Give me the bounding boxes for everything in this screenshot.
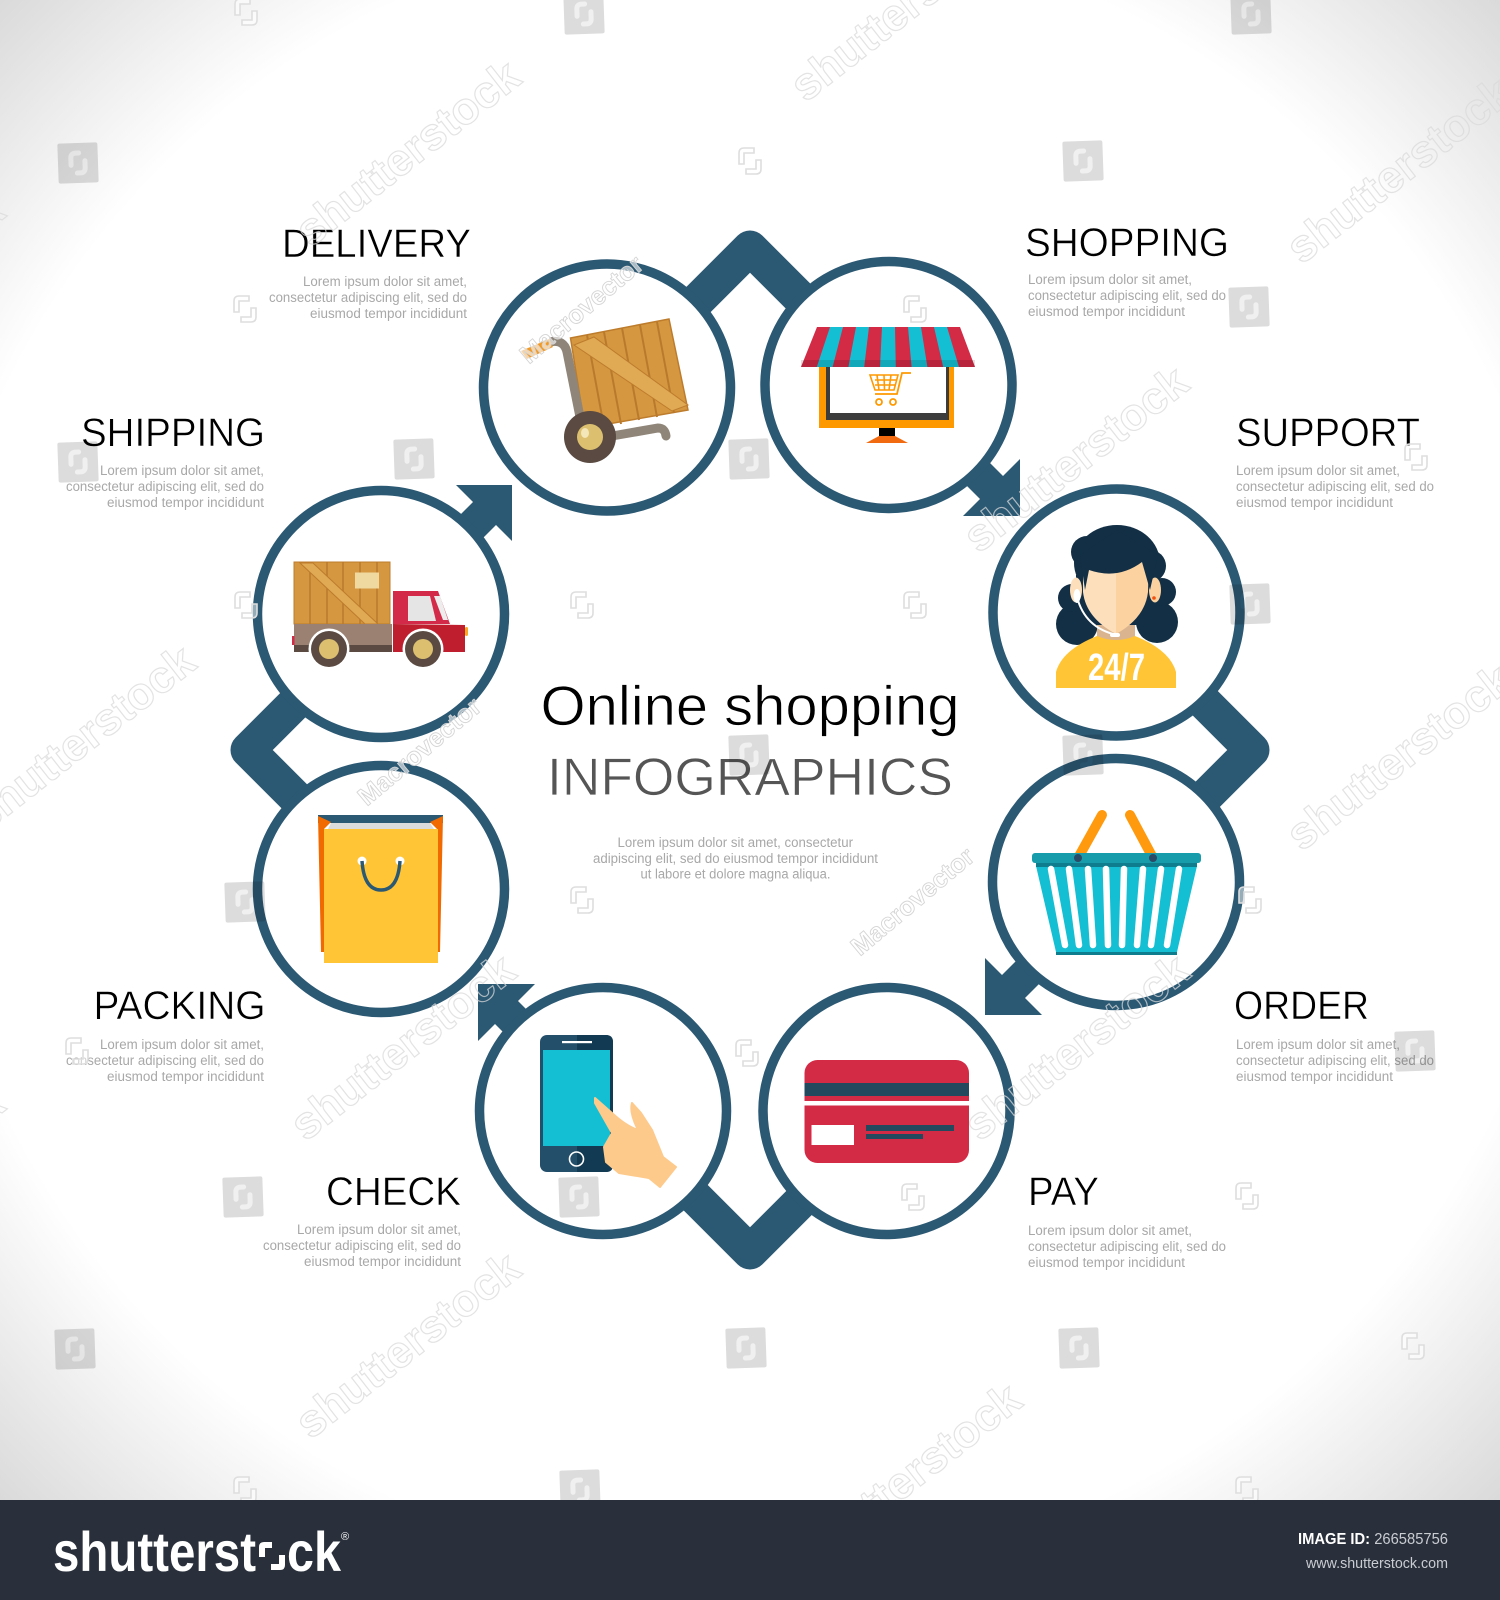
label: packing: PACKING: [94, 984, 266, 1028]
icon: shopping basket: [1032, 815, 1201, 955]
connector: pay to check chevron: [680, 1182, 820, 1252]
label: shipping: eiusmod tempor incididunt: [107, 495, 264, 510]
label: order: eiusmod tempor incididunt: [1236, 1069, 1393, 1084]
connector: packing to shipping chevron: [248, 680, 318, 820]
watermark: shutterstock and macrovector overlays: shutterstock: [280, 943, 525, 1150]
text block: center description: Lorem ipsum dolor sit amet, consectetur: [618, 835, 853, 850]
label: delivery: eiusmod tempor incididunt: [310, 306, 467, 321]
text block: center description: [593, 835, 878, 882]
label: support: consectetur adipiscing elit, sed do: [1236, 479, 1434, 494]
label: support: [1236, 411, 1434, 510]
watermark: shutterstock and macrovector overlays: shutterstock: [285, 1241, 530, 1448]
circle: packing: [258, 766, 504, 1012]
label: shopping: eiusmod tempor incididunt: [1028, 304, 1185, 319]
connector: support to order chevron: [1182, 680, 1252, 820]
arrow: shopping to support: [937, 433, 1020, 516]
arrow: check to packing: [478, 984, 561, 1067]
footer bar: [0, 1500, 1500, 1600]
circle: order: [992, 758, 1240, 1006]
label: order: consectetur adipiscing elit, sed do: [1236, 1053, 1434, 1068]
label: delivery: consectetur adipiscing elit, sed do: [269, 290, 467, 305]
footer: website: www.shutterstock.com: [1305, 1555, 1448, 1572]
ring connectors and arrows: [248, 248, 1252, 1252]
label: shopping: SHOPPING: [1025, 221, 1229, 265]
circle: check: [480, 988, 726, 1234]
watermark: shutterstock and macrovector overlays: shutterstock: [285, 49, 530, 256]
footer: shutterstock logo: o: [259, 1520, 285, 1583]
footer: image id: IMAGE ID: 266585756: [1298, 1531, 1448, 1548]
icon: storefront monitor with cart: [801, 327, 975, 443]
arrow: order to pay: [985, 932, 1068, 1015]
label: pay: eiusmod tempor incididunt: [1028, 1255, 1185, 1270]
circle: shopping: [765, 262, 1012, 508]
footer: shutterstock logo: shutterst: [53, 1520, 256, 1583]
label: pay: consectetur adipiscing elit, sed do: [1028, 1239, 1226, 1254]
label: shipping: consectetur adipiscing elit, sed do: [66, 479, 264, 494]
label: shopping: consectetur adipiscing elit, sed do: [1028, 288, 1226, 303]
footer: shutterstock logo: ck: [287, 1520, 342, 1583]
title: online shopping infographics: [540, 674, 960, 807]
label: order: [1234, 984, 1434, 1084]
label: check: [263, 1170, 461, 1269]
label: shipping: Lorem ipsum dolor sit amet,: [100, 463, 264, 478]
circle: delivery: [484, 264, 730, 511]
title: online shopping infographics: INFOGRAPHICS: [547, 748, 953, 807]
label: check: eiusmod tempor incididunt: [304, 1254, 461, 1269]
label: support: eiusmod tempor incididunt: [1236, 495, 1393, 510]
watermark: shutterstock and macrovector overlays: shutterstock: [954, 943, 1199, 1150]
label: support: SUPPORT: [1236, 411, 1420, 455]
label: check: consectetur adipiscing elit, sed do: [263, 1238, 461, 1253]
label: packing: eiusmod tempor incididunt: [107, 1069, 264, 1084]
label: pay: PAY: [1028, 1170, 1099, 1214]
circle: pay: [763, 988, 1010, 1234]
label: shopping: Lorem ipsum dolor sit amet,: [1028, 272, 1192, 287]
label: pay: [1028, 1170, 1226, 1270]
label: packing: consectetur adipiscing elit, sed do: [66, 1053, 264, 1068]
label: check: CHECK: [326, 1170, 461, 1214]
icon: support agent 24/7: [1056, 525, 1178, 689]
icon: shopping bag: [318, 815, 443, 963]
icon: hand truck with crate: [521, 319, 688, 463]
icon: delivery truck: [292, 562, 468, 670]
label: delivery: Lorem ipsum dolor sit amet,: [303, 274, 467, 289]
connector: delivery to shopping chevron: [680, 248, 820, 318]
title: online shopping infographics: Online shopping: [540, 674, 960, 737]
footer: registered mark: ®: [341, 1531, 349, 1543]
text: 24/7: 24/7: [1088, 647, 1145, 689]
text block: center description: adipiscing elit, sed do eiusmod tempor incididunt: [593, 851, 878, 866]
label: check: Lorem ipsum dolor sit amet,: [297, 1222, 461, 1237]
circle: shipping: [258, 490, 504, 738]
label: packing: [66, 984, 266, 1084]
watermark: shutterstock and macrovector overlays: Macrovector: [846, 842, 980, 961]
label: shipping: SHIPPING: [81, 411, 265, 455]
icon: credit card: [804, 1060, 969, 1163]
watermark: shutterstock and macrovector overlays: Macrovector: [353, 692, 487, 811]
watermark: shutterstock and macrovector overlays: Macrovector: [515, 250, 649, 369]
label: order: ORDER: [1234, 984, 1369, 1028]
watermark: shutterstock and macrovector overlays: shutterstock: [953, 355, 1198, 562]
label: delivery: [269, 222, 471, 321]
label: shopping: [1025, 221, 1229, 319]
arrow: shipping to delivery: [430, 485, 512, 568]
label: packing: Lorem ipsum dolor sit amet,: [100, 1037, 264, 1052]
label: shipping: [66, 411, 265, 510]
label: support: Lorem ipsum dolor sit amet,: [1236, 463, 1400, 478]
label: delivery: DELIVERY: [282, 222, 471, 266]
text block: center description: ut labore et dolore magna aliqua.: [640, 866, 830, 882]
circle: support: [993, 489, 1240, 736]
label: order: Lorem ipsum dolor sit amet,: [1236, 1037, 1400, 1052]
watermark: shutterstock and macrovector overlays: shutterstock: [786, 1372, 1031, 1579]
icon: smartphone with hand: [540, 1035, 676, 1187]
label: pay: Lorem ipsum dolor sit amet,: [1028, 1223, 1192, 1238]
